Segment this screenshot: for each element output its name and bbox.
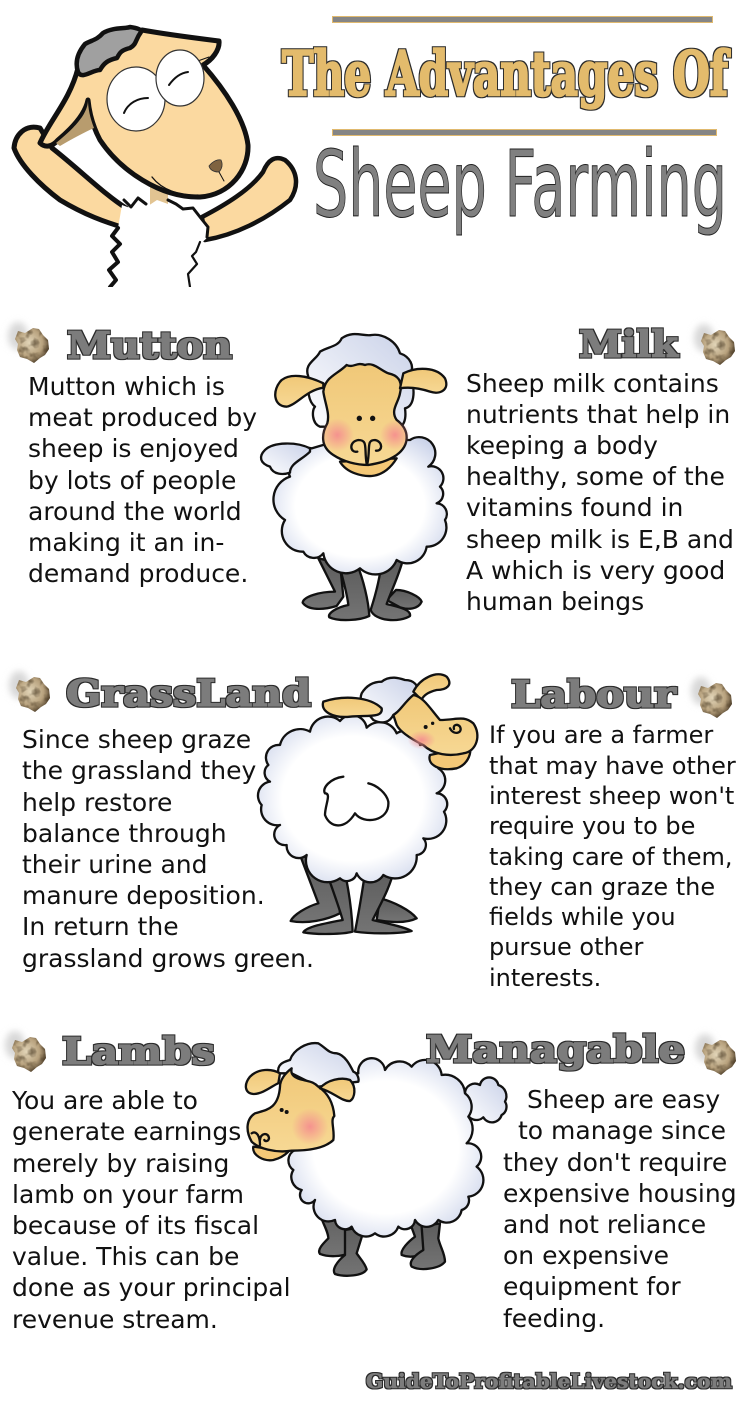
illustration: cheerful sheep with raised arms bbox=[14, 27, 296, 287]
text: mutton: making it an in- bbox=[28, 528, 224, 557]
text: managable: on expensive bbox=[503, 1241, 669, 1270]
heading: Labour: Labour bbox=[511, 674, 677, 716]
text: milk: vitamins found in bbox=[466, 493, 683, 522]
heading: Lambs: Lambs bbox=[62, 1031, 215, 1073]
text: labour: interests. bbox=[489, 964, 601, 992]
text: mutton: by lots of people bbox=[28, 466, 236, 495]
panel: milk bbox=[466, 324, 735, 616]
text: managable: feeding. bbox=[503, 1304, 605, 1333]
text: milk: human beings bbox=[466, 587, 644, 616]
text: labour: taking care of them, bbox=[489, 843, 733, 871]
text: labour: require you to be bbox=[489, 812, 695, 840]
icon: rock bbox=[695, 1034, 736, 1075]
icon: rock bbox=[694, 324, 735, 365]
text: milk: keeping a body bbox=[466, 431, 658, 460]
text: grassland: help restore bbox=[22, 788, 172, 817]
heading: GrassLand: GrassLand bbox=[66, 673, 311, 715]
text: lambs: revenue stream. bbox=[12, 1305, 218, 1334]
text: grassland: Since sheep graze bbox=[22, 725, 251, 754]
text: lambs: merely by raising bbox=[12, 1149, 229, 1178]
text: labour: If you are a farmer bbox=[489, 721, 713, 749]
text: managable: to manage since bbox=[518, 1116, 726, 1145]
text: labour: pursue other bbox=[489, 933, 643, 961]
heading: Managable: Managable bbox=[426, 1029, 685, 1071]
text: grassland: the grassland they bbox=[22, 756, 256, 785]
text: managable: Sheep are easy bbox=[527, 1085, 720, 1114]
text: mutton: around the world bbox=[28, 497, 242, 526]
panel: grassland bbox=[9, 671, 314, 973]
footer: website: GuideToProfitableLivestock.com bbox=[366, 1369, 732, 1393]
text: milk: A which is very good bbox=[466, 556, 725, 585]
icon: rock bbox=[9, 671, 50, 712]
text: managable: expensive housing bbox=[503, 1179, 737, 1208]
text: managable: they don't require bbox=[503, 1148, 727, 1177]
text: labour: fields while you bbox=[489, 903, 676, 931]
text: lambs: value. This can be bbox=[12, 1242, 239, 1271]
panel: labour bbox=[489, 674, 736, 992]
text: milk: sheep milk is E,B and bbox=[466, 525, 734, 554]
text: milk: healthy, some of the bbox=[466, 462, 725, 491]
text: milk: Sheep milk contains bbox=[466, 369, 719, 398]
illustration: sheep from behind bbox=[258, 674, 477, 934]
illustration: sheep in profile bbox=[246, 1043, 507, 1276]
text: lambs: You are able to bbox=[11, 1086, 198, 1115]
icon: rock bbox=[8, 322, 49, 363]
text: mutton: Mutton which is bbox=[28, 372, 225, 401]
text: milk: nutrients that help in bbox=[466, 400, 730, 429]
panel: managable bbox=[426, 1029, 737, 1333]
text: lambs: lamb on your farm bbox=[12, 1180, 244, 1209]
text: lambs: generate earnings bbox=[12, 1117, 241, 1146]
text: lambs: because of its fiscal bbox=[12, 1211, 259, 1240]
icon: rock bbox=[5, 1031, 46, 1072]
text: managable: and not reliance bbox=[503, 1210, 706, 1239]
text: labour: that may have other bbox=[489, 752, 736, 780]
text: mutton: meat produced by bbox=[28, 403, 257, 432]
text: lambs: done as your principal bbox=[12, 1273, 291, 1302]
text: grassland: grassland grows green. bbox=[22, 944, 314, 973]
text: mutton: sheep is enjoyed bbox=[28, 434, 239, 463]
illustration: sheep facing front bbox=[261, 334, 447, 620]
panel: lambs bbox=[5, 1031, 291, 1334]
heading: Milk: Milk bbox=[579, 324, 679, 366]
heading: Mutton: Mutton bbox=[67, 325, 232, 367]
text: grassland: manure deposition. bbox=[22, 881, 265, 910]
text: managable: equipment for bbox=[503, 1272, 681, 1301]
text: grassland: In return the bbox=[22, 912, 179, 941]
text: grassland: balance through bbox=[22, 819, 227, 848]
text: grassland: their urine and bbox=[22, 850, 207, 879]
text: labour: they can graze the bbox=[489, 873, 715, 901]
title bar middle bbox=[332, 130, 716, 136]
icon: rock bbox=[691, 677, 732, 718]
title bar top bbox=[332, 16, 712, 22]
panel: mutton bbox=[8, 322, 257, 588]
text: labour: interest sheep won't bbox=[489, 782, 734, 810]
text: mutton: demand produce. bbox=[28, 559, 248, 588]
